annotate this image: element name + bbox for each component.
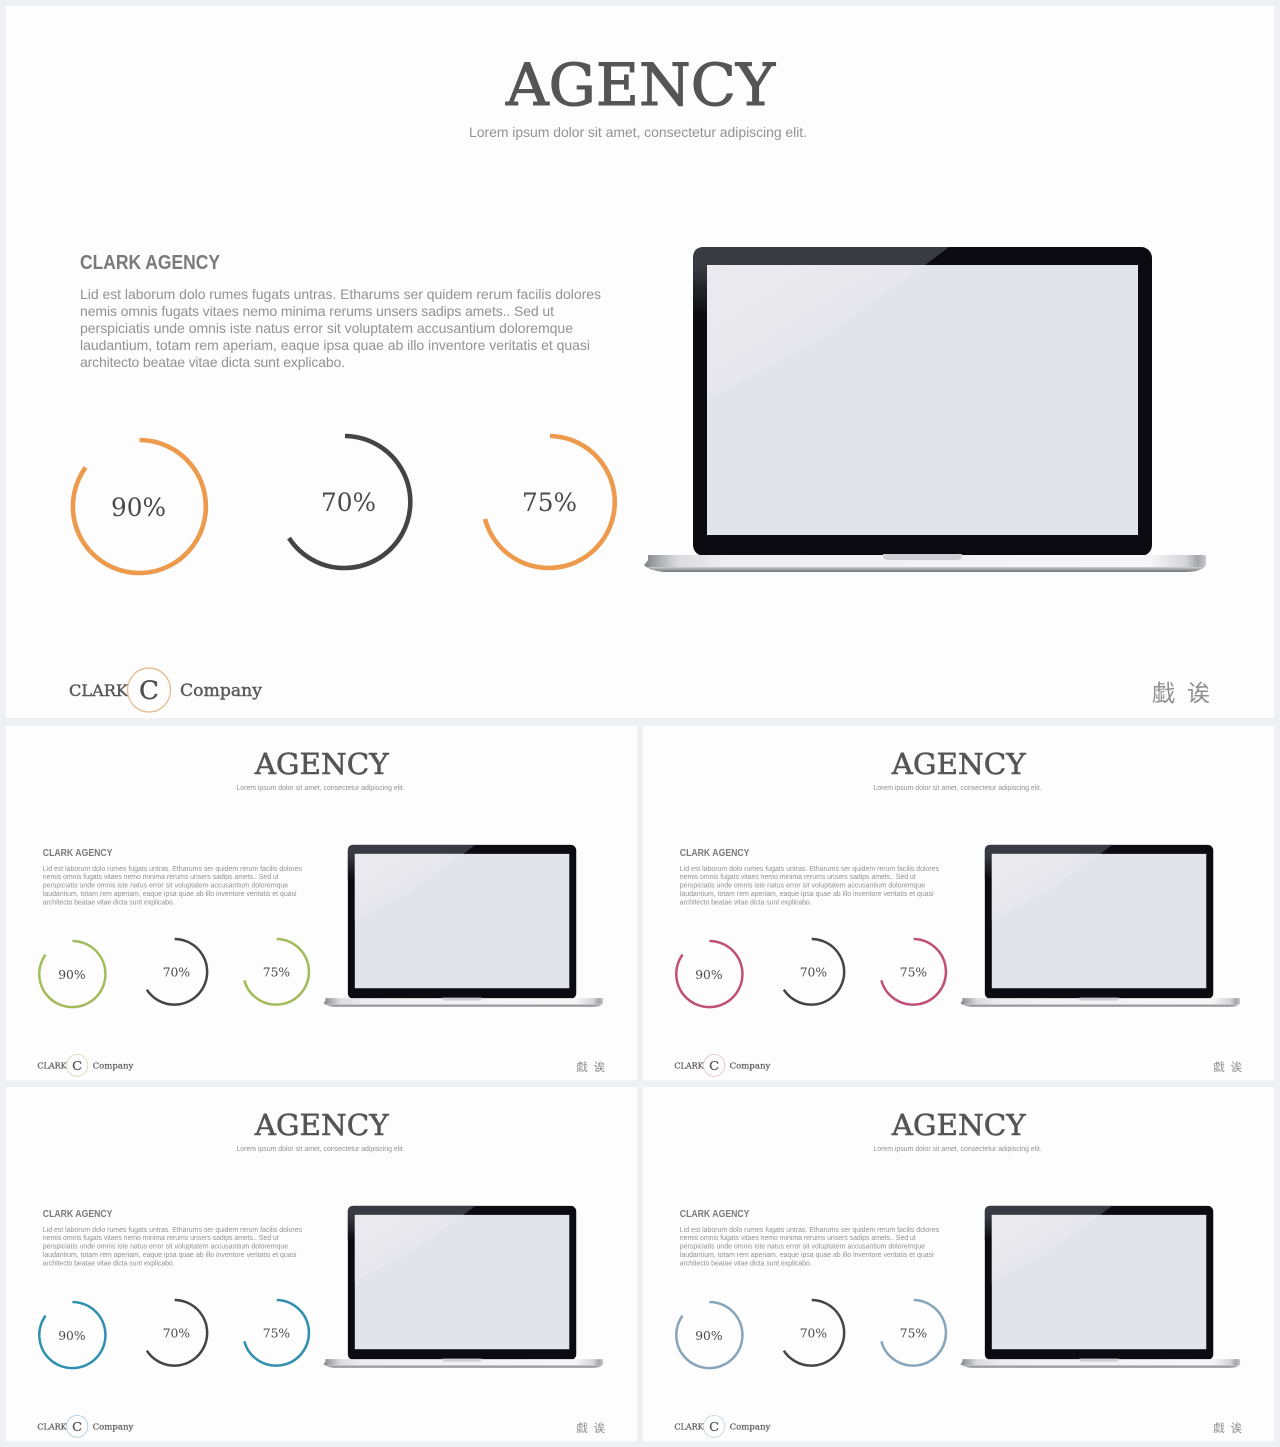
progress ring: 90%: 90% [58,1328,86,1343]
page glyphs: 戱 [576,1060,588,1074]
text block: Clark Agency: CLARK AGENCY [680,848,750,859]
logo: Clark Company: C [72,1419,82,1434]
logo: Clark Company [674,1415,771,1437]
progress ring: 75%: 75% [900,1325,927,1340]
page glyphs: 戱 [1152,680,1175,706]
text block: Clark Agency: CLARK AGENCY [43,848,113,859]
page glyphs: 诶 [1231,1060,1243,1074]
page glyphs: 诶 [1187,680,1210,706]
text block: Clark Agency: Lid est laborum dolo rumes fugats untras. Etharums ser quidem rerum facilis dolores [80,286,601,302]
text block: Clark Agency [43,848,303,907]
logo: Clark Company [37,1415,134,1437]
laptop mockup [323,1206,603,1368]
subtitle: Lorem ipsum dolor sit amet, consectetur adipiscing elit. [873,1146,1042,1153]
logo: Clark Company: C [709,1419,719,1434]
text block: Clark Agency: perspiciatis unde omnis iste natus error sit voluptatem accusantium doloremque [80,320,573,336]
text block: Clark Agency: Lid est laborum dolo rumes fugats untras. Etharums ser quidem rerum facilis dolores [43,1227,303,1234]
progress ring: 90%: 90% [111,493,166,522]
panel: teal slide [6,1087,637,1441]
progress ring: 70%: 70% [800,964,827,979]
progress ring: 75% [881,939,946,1005]
progress ring: 75% [244,939,309,1005]
logo: Clark Company [69,668,262,712]
text block: Clark Agency: laudantium, totam rem aperiam, eaque ipsa quae ab illo inventore veritatis et quasi [80,337,590,353]
progress ring: 90% [676,941,742,1007]
logo: Clark Company [37,1054,134,1076]
page glyphs [1152,680,1210,706]
text block: Clark Agency: nemis omnis fugats vitaes nemo minima rerums unsers sadips amets.. Sed ut [43,1235,279,1242]
logo: Clark Company: Company [730,1421,771,1431]
panel: crimson slide [643,726,1274,1080]
text block: Clark Agency: architecto beatae vitae dicta sunt explicabo. [80,354,345,370]
text block: Clark Agency: architecto beatae vitae dicta sunt explicabo. [680,900,812,907]
progress ring: 90%: 90% [695,1328,723,1343]
subtitle: Lorem ipsum dolor sit amet, consectetur adipiscing elit. [236,785,405,792]
logo: Clark Company: Company [93,1421,134,1431]
logo: Clark Company: Company [93,1060,134,1070]
progress ring: 70% [784,1300,844,1366]
logo: Clark Company: CLARK [674,1422,705,1431]
laptop mockup [644,247,1206,572]
subtitle: Lorem ipsum dolor sit amet, consectetur adipiscing elit. [873,785,1042,792]
text block: Clark Agency: laudantium, totam rem aperiam, eaque ipsa quae ab illo inventore veritatis et quasi [680,891,934,898]
page glyphs: 戱 [576,1421,588,1435]
text block: Clark Agency [680,848,940,907]
progress ring: 75% [485,436,615,568]
text block: Clark Agency: nemis omnis fugats vitaes nemo minima rerums unsers sadips amets.. Sed ut [680,874,916,881]
progress ring: 75%: 75% [263,1325,290,1340]
progress ring: 70%: 70% [321,488,376,517]
page glyphs [576,1060,606,1074]
progress ring: 70% [289,436,410,568]
text block: Clark Agency: CLARK AGENCY [80,252,221,274]
text block: Clark Agency: CLARK AGENCY [680,1209,750,1220]
page glyphs: 戱 [1213,1060,1225,1074]
text block: Clark Agency [80,252,601,370]
subtitle: Lorem ipsum dolor sit amet, consectetur adipiscing elit. [469,124,807,140]
page glyphs [1213,1060,1243,1074]
progress ring: 75%: 75% [900,964,927,979]
text block: Clark Agency: perspiciatis unde omnis iste natus error sit voluptatem accusantium doloremque [680,883,925,890]
text block: Clark Agency: perspiciatis unde omnis iste natus error sit voluptatem accusantium doloremque [43,1244,288,1251]
page glyphs: 诶 [1231,1421,1243,1435]
text block: Clark Agency: laudantium, totam rem aperiam, eaque ipsa quae ab illo inventore veritatis et quasi [680,1252,934,1259]
laptop mockup [323,845,603,1007]
progress ring: 90% [39,1302,105,1368]
progress ring: 70%: 70% [800,1325,827,1340]
logo: Clark Company: CLARK [674,1061,705,1070]
panel: green slide [6,726,637,1080]
text block: Clark Agency [43,1209,303,1268]
progress ring: 70% [147,1300,207,1366]
logo: Clark Company: C [139,676,159,705]
text block: Clark Agency: architecto beatae vitae dicta sunt explicabo. [43,1261,175,1268]
page glyphs: 戱 [1213,1421,1225,1435]
logo: Clark Company: Company [730,1060,771,1070]
page glyphs: 诶 [594,1421,606,1435]
progress ring: 90%: 90% [58,967,86,982]
text block: Clark Agency: Lid est laborum dolo rumes fugats untras. Etharums ser quidem rerum facilis dolores [680,1227,940,1234]
text block: Clark Agency: laudantium, totam rem aperiam, eaque ipsa quae ab illo inventore veritatis et quasi [43,891,297,898]
logo: Clark Company: Company [180,681,262,701]
text block: Clark Agency: architecto beatae vitae dicta sunt explicabo. [680,1261,812,1268]
logo: Clark Company: CLARK [69,681,129,700]
progress ring: 70%: 70% [163,964,190,979]
text block: Clark Agency: Lid est laborum dolo rumes fugats untras. Etharums ser quidem rerum facilis dolores [680,866,940,873]
text block: Clark Agency: perspiciatis unde omnis iste natus error sit voluptatem accusantium doloremque [680,1244,925,1251]
laptop mockup [960,845,1240,1007]
text block: Clark Agency: architecto beatae vitae dicta sunt explicabo. [43,900,175,907]
progress ring: 75% [881,1300,946,1366]
progress ring: 75%: 75% [522,488,577,517]
text block: Clark Agency: nemis omnis fugats vitaes nemo minima rerums unsers sadips amets.. Sed ut [43,874,279,881]
progress ring: 90% [39,941,105,1007]
progress ring: 90% [676,1302,742,1368]
page glyphs [1213,1421,1243,1435]
text block: Clark Agency [680,1209,940,1268]
text block: Clark Agency: laudantium, totam rem aperiam, eaque ipsa quae ab illo inventore veritatis et quasi [43,1252,297,1259]
logo: Clark Company: C [72,1058,82,1073]
logo: Clark Company: CLARK [37,1422,68,1431]
progress ring: 75% [244,1300,309,1366]
progress ring: 90%: 90% [695,967,723,982]
panel: steel blue slide [643,1087,1274,1441]
text block: Clark Agency: nemis omnis fugats vitaes nemo minima rerums unsers sadips amets.. Sed ut [680,1235,916,1242]
logo: Clark Company [674,1054,771,1076]
progress ring: 90% [73,440,206,573]
page glyphs: 诶 [594,1060,606,1074]
progress ring: 70%: 70% [163,1325,190,1340]
panel: main orange slide [6,6,1274,718]
text block: Clark Agency: CLARK AGENCY [43,1209,113,1220]
laptop mockup [960,1206,1240,1368]
title: AGENCY [505,51,776,119]
page glyphs [576,1421,606,1435]
text block: Clark Agency: Lid est laborum dolo rumes fugats untras. Etharums ser quidem rerum facilis dolores [43,866,303,873]
subtitle: Lorem ipsum dolor sit amet, consectetur adipiscing elit. [236,1146,405,1153]
progress ring: 70% [784,939,844,1005]
logo: Clark Company: C [709,1058,719,1073]
title: AGENCY [891,1108,1027,1142]
title: AGENCY [254,1108,390,1142]
progress ring: 75%: 75% [263,964,290,979]
title: AGENCY [891,747,1027,781]
title: AGENCY [254,747,390,781]
text block: Clark Agency: nemis omnis fugats vitaes nemo minima rerums unsers sadips amets.. Sed ut [80,303,554,319]
progress ring: 70% [147,939,207,1005]
logo: Clark Company: CLARK [37,1061,68,1070]
text block: Clark Agency: perspiciatis unde omnis iste natus error sit voluptatem accusantium doloremque [43,883,288,890]
